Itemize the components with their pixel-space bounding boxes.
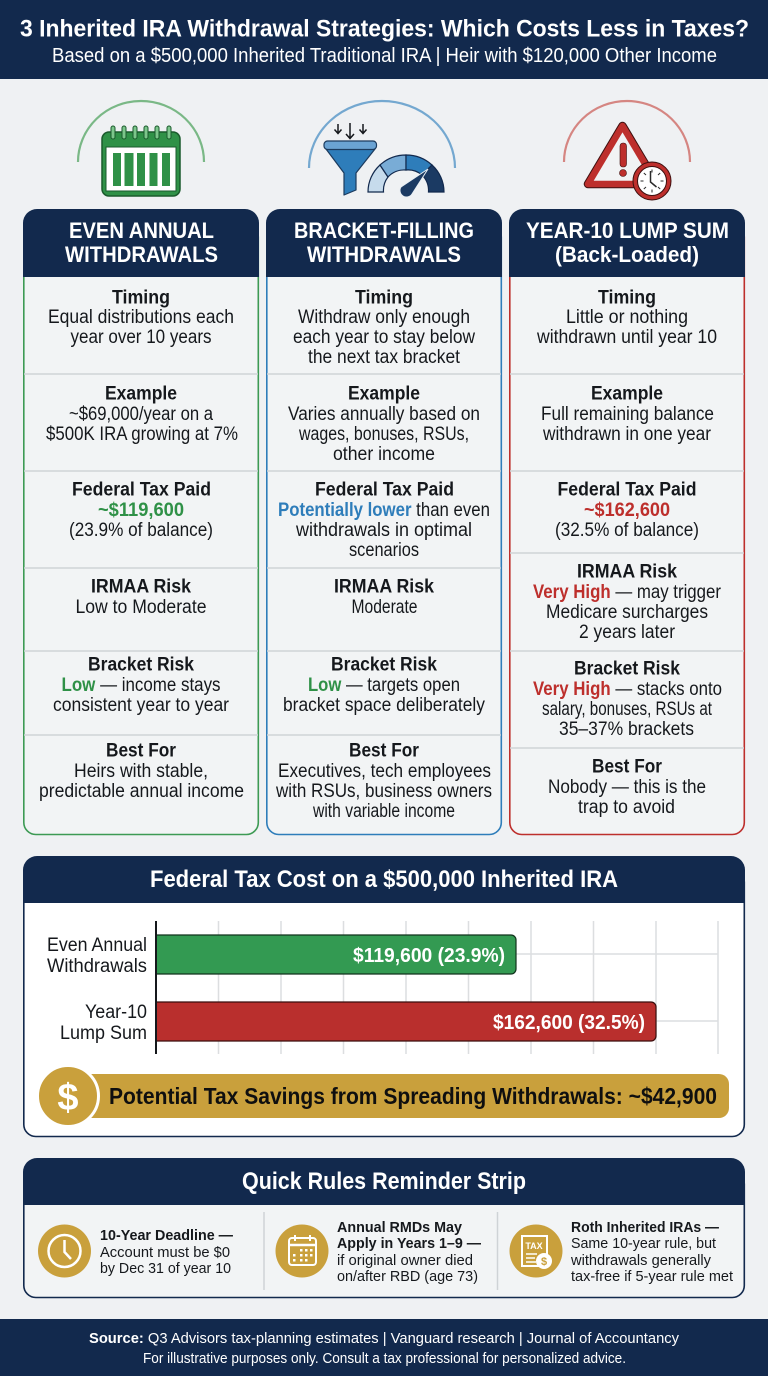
footer: sources: For illustrative purposes only. Consult a tax professional for personalized advice.: [143, 1351, 626, 1367]
row: timing: [48, 287, 234, 348]
column heading: BRACKET-FILLING: [294, 218, 474, 243]
row: federal tax paid: [69, 479, 213, 541]
callout: potential tax savings: Potential Tax Savings from Spreading Withdrawals: ~$42,900: [109, 1083, 717, 1109]
rule: annual rmds: if original owner died: [337, 1252, 473, 1269]
row: irmaa risk: 2 years later: [579, 622, 676, 643]
row: timing: the next tax bracket: [308, 347, 461, 368]
row: timing: Timing: [355, 287, 413, 309]
row: example: withdrawn in one year: [542, 424, 712, 445]
axis label: lump sum: Lump Sum: [60, 1023, 147, 1044]
callout: potential tax savings: $: [57, 1077, 79, 1119]
row: best for: with variable income: [312, 801, 455, 822]
rule: annual rmds: Apply in Years 1–9 —: [337, 1235, 481, 1252]
column heading: [294, 218, 474, 267]
rule: roth inherited iras: tax-free if 5-year rule met: [571, 1268, 734, 1285]
panel: year-10 lump sum: [509, 209, 745, 834]
row: bracket risk: Low — targets open: [308, 675, 460, 696]
row: best for: Heirs with stable,: [74, 761, 208, 782]
row: irmaa risk: [533, 561, 722, 643]
row: best for: Executives, tech employees: [278, 761, 491, 782]
icon: calendar: [276, 1224, 328, 1278]
row: bracket risk: salary, bonuses, RSUs at: [542, 699, 713, 720]
row: best for: trap to avoid: [578, 797, 675, 818]
row: best for: [39, 740, 244, 802]
row: federal tax paid: Federal Tax Paid: [72, 479, 211, 501]
rule: roth inherited iras: withdrawals generally: [570, 1252, 711, 1269]
row: irmaa risk: [76, 576, 206, 618]
row: irmaa risk: Moderate: [352, 597, 418, 618]
row: best for: predictable annual income: [39, 781, 244, 802]
rule: 10-year deadline: Account must be $0: [100, 1244, 230, 1261]
row: example: [541, 383, 714, 445]
icon: tax document: $: [541, 1256, 547, 1268]
row: federal tax paid: Federal Tax Paid: [558, 479, 696, 501]
row: bracket risk: bracket space deliberately: [283, 695, 485, 716]
row: bracket risk: [53, 654, 230, 716]
footer: sources: [0, 1319, 768, 1376]
rule: annual rmds: [276, 1219, 481, 1285]
axis label: lump sum: Year-10: [85, 1002, 147, 1023]
icon: clock: [38, 1224, 91, 1278]
row: best for: [548, 756, 706, 818]
row: example: Full remaining balance: [541, 404, 714, 425]
row: best for: with RSUs, business owners: [275, 781, 492, 802]
row: federal tax paid: withdrawals in optimal: [295, 520, 472, 541]
row: example: [288, 383, 480, 465]
row: irmaa risk: Very High — may trigger: [533, 582, 722, 603]
row: timing: each year to stay below: [293, 327, 475, 348]
axis label: even annual: Withdrawals: [47, 956, 147, 977]
row: timing: Equal distributions each: [48, 307, 234, 328]
row: federal tax paid: ~$119,600: [98, 500, 184, 521]
subtitle: Based on a $500,000 Inherited Traditional IRA | Heir with $120,000 Other Income: [52, 45, 717, 67]
icon: tax document: TAX: [525, 1241, 543, 1251]
icon: blue funnel and gauge with arc: [309, 101, 455, 197]
row: best for: Best For: [592, 756, 662, 778]
column heading: WITHDRAWALS: [65, 242, 218, 267]
row: bracket risk: Bracket Risk: [331, 654, 437, 676]
row: timing: [536, 287, 717, 348]
panel: federal tax cost chart: [23, 856, 745, 1136]
row: example: ~$69,000/year on a: [69, 404, 213, 425]
bar: year-10 lump sum: [156, 1002, 656, 1041]
column heading: [65, 218, 218, 267]
row: irmaa risk: IRMAA Risk: [334, 576, 434, 598]
rule: roth inherited iras: Roth Inherited IRAs —: [571, 1219, 719, 1236]
rule: annual rmds: on/after RBD (age 73): [337, 1268, 478, 1285]
row: federal tax paid: ~$162,600: [584, 500, 670, 521]
bar: even annual: $119,600 (23.9%): [353, 945, 505, 967]
row: bracket risk: Bracket Risk: [88, 654, 194, 676]
bar chart: [47, 921, 718, 1054]
callout: potential tax savings: [38, 1066, 729, 1126]
row: best for: [275, 740, 492, 822]
icon: red warning triangle with clock and arc: [564, 101, 690, 200]
row: federal tax paid: [555, 479, 699, 541]
row: irmaa risk: Medicare surcharges: [546, 602, 708, 623]
chart heading: Federal Tax Cost on a $500,000 Inherited IRA: [150, 866, 618, 893]
panel: even annual withdrawals: [23, 209, 259, 834]
row: federal tax paid: [278, 479, 490, 561]
panel: quick rules reminder strip: [23, 1158, 745, 1298]
row: bracket risk: Very High — stacks onto: [533, 679, 722, 700]
row: example: wages, bonuses, RSUs,: [298, 424, 469, 445]
column heading: [526, 218, 729, 267]
rule: annual rmds: Annual RMDs May: [337, 1219, 463, 1236]
column heading: WITHDRAWALS: [307, 242, 461, 267]
row: example: Example: [591, 383, 663, 405]
column heading: (Back-Loaded): [555, 242, 699, 267]
row: federal tax paid: scenarios: [349, 540, 419, 561]
panel: bracket-filling withdrawals: [266, 209, 502, 834]
row: example: Example: [348, 383, 420, 405]
row: timing: year over 10 years: [70, 327, 212, 348]
axis label: even annual: [47, 935, 147, 977]
row: federal tax paid: Potentially lower than even: [278, 500, 490, 521]
column heading: EVEN ANNUAL: [69, 218, 214, 243]
icon: tax document: [510, 1224, 562, 1278]
bar: year-10 lump sum: $162,600 (32.5%): [493, 1012, 645, 1034]
row: example: Varies annually based on: [288, 404, 480, 425]
row: best for: Best For: [349, 740, 419, 762]
row: example: $500K IRA growing at 7%: [46, 424, 238, 445]
row: irmaa risk: IRMAA Risk: [91, 576, 191, 598]
row: bracket risk: 35–37% brackets: [559, 719, 694, 740]
icon: green calendar with arc: [78, 101, 204, 196]
footer: sources: Source: Q3 Advisors tax-planning estimates | Vanguard research | Journal of Accountancy: [89, 1330, 679, 1347]
row: example: Example: [105, 383, 177, 405]
bar: even annual: [156, 935, 516, 974]
rule: roth inherited iras: Same 10-year rule, but: [571, 1235, 717, 1252]
row: federal tax paid: (32.5% of balance): [555, 520, 699, 541]
axis label: even annual: Even Annual: [47, 935, 147, 956]
header banner: [0, 0, 768, 79]
rule: 10-year deadline: [38, 1224, 233, 1278]
row: timing: [293, 287, 475, 368]
row: timing: Withdraw only enough: [298, 307, 470, 328]
axis label: lump sum: [60, 1002, 147, 1044]
rule: 10-year deadline: by Dec 31 of year 10: [100, 1260, 231, 1277]
row: best for: Best For: [106, 740, 176, 762]
row: example: other income: [333, 444, 435, 465]
row: timing: Timing: [598, 287, 656, 309]
row: federal tax paid: (23.9% of balance): [69, 520, 213, 541]
row: timing: withdrawn until year 10: [536, 327, 717, 348]
row: bracket risk: consistent year to year: [53, 695, 230, 716]
row: irmaa risk: IRMAA Risk: [577, 561, 677, 583]
row: example: [46, 383, 238, 445]
row: bracket risk: Bracket Risk: [574, 658, 680, 680]
row: bracket risk: [533, 658, 722, 740]
row: timing: Timing: [112, 287, 170, 309]
row: timing: Little or nothing: [566, 307, 688, 328]
row: irmaa risk: [334, 576, 434, 618]
column heading: YEAR-10 LUMP SUM: [526, 218, 729, 243]
rule: roth inherited iras: [510, 1219, 734, 1285]
rule: 10-year deadline: 10-Year Deadline —: [100, 1227, 233, 1244]
row: bracket risk: [283, 654, 485, 716]
row: bracket risk: Low — income stays: [62, 675, 220, 696]
row: best for: Nobody — this is the: [548, 777, 706, 798]
row: irmaa risk: Low to Moderate: [76, 597, 206, 618]
strip heading: Quick Rules Reminder Strip: [242, 1168, 526, 1195]
row: federal tax paid: Federal Tax Paid: [315, 479, 454, 501]
